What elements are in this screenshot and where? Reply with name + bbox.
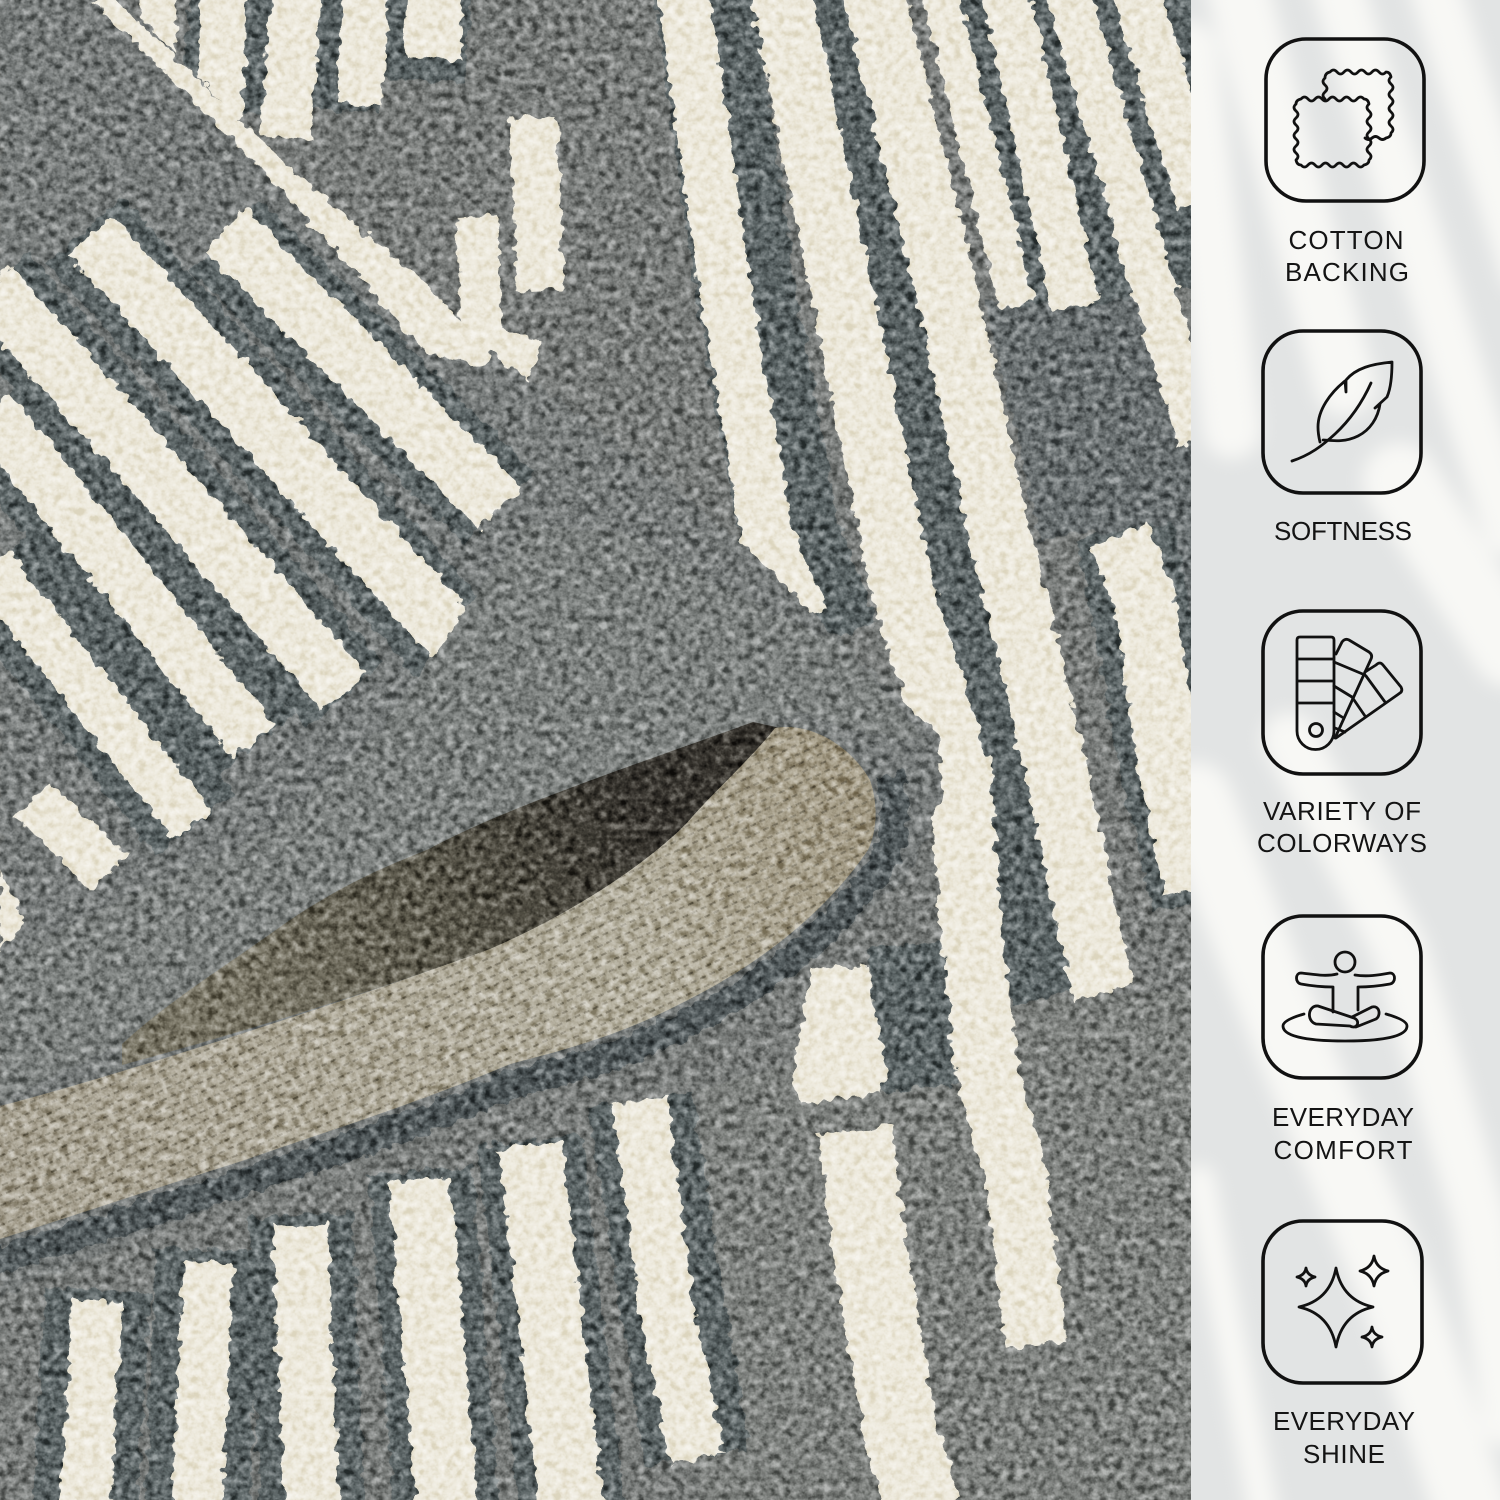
cream stripe, lower centre: [855, 1130, 925, 1500]
label: everyday comfort: EVERYDAY: [1272, 1102, 1414, 1132]
icon: feather: [1263, 331, 1421, 493]
dark bands on roll: [0, 230, 500, 825]
cream stripe C: [868, 0, 1105, 992]
sidebar background: [1191, 0, 1500, 1500]
rug background: [0, 0, 1191, 1500]
cream stripe H: [1118, 536, 1195, 890]
cream stripe E: [1000, 0, 1076, 306]
label: variety of colorways: VARIETY OF: [1263, 796, 1421, 826]
dark bands beside stripes: [700, 0, 830, 640]
label: cotton backing: [1285, 225, 1409, 287]
rolled corner: woven backing in shadow: [122, 722, 790, 1065]
label: everyday shine: [1273, 1406, 1415, 1469]
bottom stripes with dark bands: [85, 1100, 697, 1500]
roll stripes: [225, 230, 500, 508]
feature: softness: [1263, 331, 1421, 546]
feature: everyday shine: [1263, 1221, 1422, 1469]
dark block behind stripe ends: [985, 285, 1195, 620]
icon: seated meditation figure: [1263, 916, 1421, 1078]
feature: cotton backing: [1266, 39, 1424, 287]
label: cotton backing: BACKING: [1285, 257, 1409, 287]
faded rug pattern behind sidebar: [1188, 0, 1500, 1500]
label: variety of colorways: COLORWAYS: [1257, 828, 1427, 858]
flat rug stripes: [85, 0, 1200, 1500]
cream stripe G: [1130, 0, 1200, 205]
cream patch: [793, 966, 887, 1104]
lighter heathered floor, lower right: [700, 990, 1191, 1500]
fibre texture overlay: [0, 0, 1191, 1500]
cream stripe B: [776, 0, 1036, 1345]
cream fold line: [95, 0, 494, 368]
icon: sparkles: [1263, 1221, 1422, 1383]
label: cotton backing: COTTON: [1288, 225, 1404, 255]
feature: variety of colorways: [1257, 611, 1427, 858]
cream stripe D: [934, 0, 1017, 305]
label: variety of colorways: [1257, 796, 1427, 858]
rug photo: flat rug and rolled corner: [0, 0, 1200, 1500]
rolled corner: surface with stripes: [0, 0, 944, 952]
label: everyday shine: EVERYDAY: [1273, 1406, 1415, 1436]
cream stripe A: [680, 0, 805, 620]
cream stripe F: [1062, 0, 1200, 440]
label: everyday comfort: COMFORT: [1274, 1135, 1413, 1165]
feature: everyday comfort: [1263, 916, 1421, 1165]
label: everyday shine: SHINE: [1303, 1439, 1385, 1469]
rolled corner: backing band: [0, 727, 876, 1239]
label: softness: SOFTNESS: [1274, 516, 1412, 546]
icon: fabric swatches: [1266, 39, 1424, 201]
top short stripes: [232, 0, 420, 110]
roll surface: [134, 18, 944, 820]
label: everyday comfort: [1272, 1102, 1414, 1165]
panel: feature sidebar: [1188, 0, 1500, 1500]
icon: colour fan deck: [1263, 611, 1421, 774]
rolled corner: dark rim: [0, 775, 895, 1262]
roll lip: [0, 525, 925, 1100]
